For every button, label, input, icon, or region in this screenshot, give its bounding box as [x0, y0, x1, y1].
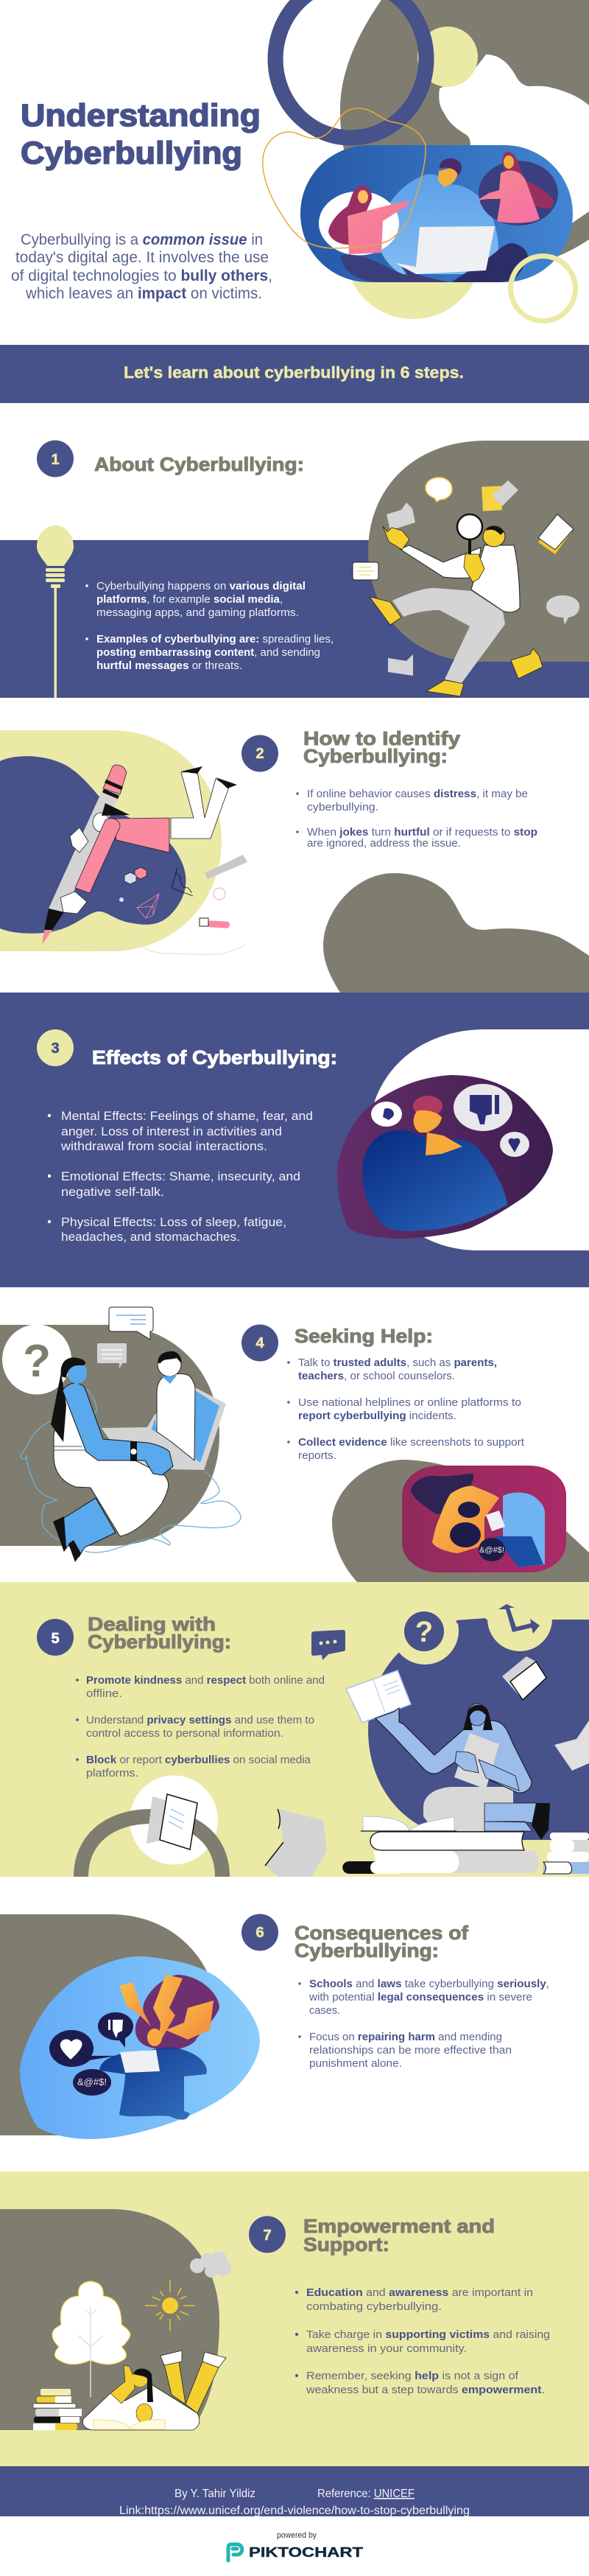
laptop — [395, 226, 495, 274]
bullet list: report cyberbullying incidents. — [298, 1410, 456, 1422]
bullet list: Examples of cyberbullying are: spreading lies, — [96, 633, 334, 645]
panel: step 5 dealing with cyberbullying — [0, 1582, 589, 1877]
bullet list: Education and awareness are important in — [306, 2286, 533, 2299]
bullet list: Talk to trusted adults, such as parents, — [298, 1357, 497, 1369]
bullet list: teachers, or school counselors. — [298, 1370, 455, 1382]
left woman head — [358, 190, 368, 203]
bullet list: hurtful messages or threats. — [96, 659, 242, 672]
illustration: grey open book — [265, 1809, 327, 1877]
yellow hand — [383, 526, 409, 550]
graph lines — [172, 868, 193, 896]
pencil bands — [103, 781, 122, 797]
hand on handle — [464, 554, 484, 582]
decorative navy ring — [275, 0, 426, 138]
icon: broken heart — [500, 1132, 529, 1157]
footer credits — [0, 2466, 589, 2517]
middle book — [373, 1851, 539, 1873]
head — [68, 1362, 87, 1384]
chemistry hexagons — [124, 867, 147, 884]
intro paragraph: today's digital age. It involves the use — [15, 249, 269, 266]
bullet list: control access to personal information. — [86, 1727, 283, 1740]
bullet list — [298, 1978, 549, 2070]
document shadow — [147, 1796, 171, 1844]
number badge: 7 — [263, 2227, 272, 2244]
man torso — [378, 174, 498, 274]
held book — [454, 1733, 499, 1789]
bullet list: Understand privacy settings and use them to — [86, 1714, 314, 1726]
white circle — [130, 1776, 218, 1864]
neck — [426, 1133, 462, 1155]
navy background — [0, 993, 589, 1287]
grey legs — [392, 588, 505, 683]
bullet list: cyberbullying. — [307, 801, 378, 813]
intro paragraph — [11, 231, 272, 302]
footer credits: Reference: UNICEF — [317, 2488, 415, 2500]
grey folder — [387, 503, 415, 531]
icon: cloud — [190, 2251, 231, 2278]
white pill — [368, 1029, 589, 1250]
number badge: 1 — [51, 452, 60, 468]
bullet list: are ignored, address the issue. — [307, 837, 461, 850]
illustration: man with magnifying glass — [353, 477, 579, 696]
grey document — [492, 480, 518, 506]
number badge: 5 — [51, 1631, 60, 1647]
socks — [161, 2351, 182, 2365]
bullet list: relationships can be more effective than — [309, 2044, 512, 2057]
bullet list: combating cyberbullying. — [306, 2300, 442, 2313]
hand over face — [414, 1110, 442, 1133]
black book — [342, 1861, 401, 1874]
panel: step 1 about cyberbullying — [0, 441, 589, 698]
tablet — [486, 1511, 505, 1531]
banner: 6 steps — [0, 345, 589, 403]
man trousers left — [341, 255, 449, 282]
bullet list — [295, 2286, 550, 2396]
pencil tip — [42, 930, 52, 945]
right woman body — [477, 170, 540, 223]
tablet — [120, 2050, 160, 2073]
decorative orange squiggle — [263, 108, 426, 248]
bullet list: Collect evidence like screenshots to support — [298, 1436, 525, 1449]
icon: question mark — [404, 1611, 444, 1651]
bullet list: headaches, and stomachaches. — [61, 1230, 240, 1244]
icon: question mark — [2, 1325, 71, 1394]
trousers — [171, 771, 229, 839]
decorative yellow circle top — [417, 27, 478, 87]
illustration: laptop — [102, 1387, 226, 1470]
man trousers right — [451, 243, 528, 282]
hair — [51, 1373, 66, 1442]
headphone cable — [21, 1389, 241, 1553]
grey pill — [368, 441, 589, 662]
yellow cutout circles — [391, 1586, 552, 1665]
bullet list: with potential legal consequences in severe — [308, 1991, 532, 2003]
yellow document — [482, 486, 502, 511]
legs — [164, 2362, 186, 2404]
bullet list: Mental Effects: Feelings of shame, fear, and — [61, 1109, 313, 1123]
gray thigh — [423, 1787, 513, 1831]
arm — [75, 819, 120, 893]
bullet list — [296, 788, 537, 850]
head — [413, 1096, 442, 1116]
heading — [88, 1613, 231, 1653]
heading: How to Identify — [303, 727, 461, 749]
note diamond — [538, 514, 574, 554]
bullet list: Emotional Effects: Shame, insecurity, and — [61, 1169, 300, 1183]
hair — [463, 1705, 493, 1730]
heading — [303, 2215, 495, 2255]
crystal — [137, 894, 159, 918]
number badge — [241, 735, 278, 772]
decorative blob: grey cloud — [340, 0, 589, 256]
title: Understanding — [21, 98, 261, 133]
yellow arm and hand — [110, 2365, 135, 2404]
bullet list: platforms. — [86, 1767, 138, 1779]
icon: arrows — [498, 1604, 540, 1634]
man hair — [440, 158, 462, 175]
head — [132, 2370, 148, 2387]
white dress — [54, 1395, 169, 1536]
small note — [353, 562, 378, 580]
orange figure — [432, 1486, 499, 1553]
bullet list: Remember, seeking help is not a sign of — [306, 2370, 519, 2382]
bullet list: weakness but a step towards empowerment . — [306, 2384, 545, 2396]
icon: question mark: ? — [415, 1616, 433, 1648]
document lines — [169, 1809, 184, 1829]
face — [147, 2029, 162, 2046]
thumbs down bubble — [98, 2012, 133, 2048]
illustration: woman comforting victim — [402, 1466, 566, 1572]
test tube — [200, 918, 230, 928]
blue trousers — [484, 1803, 543, 1831]
panel: step 4 seeking help — [0, 1307, 589, 1582]
document — [160, 1794, 197, 1849]
yellow background — [0, 1582, 589, 1877]
right video bubble — [479, 161, 558, 225]
bullet list: Take charge in supporting victims and raising — [306, 2328, 550, 2341]
icon: thumbs down — [454, 1084, 512, 1131]
magnifying glass — [457, 514, 482, 573]
panel: hero — [11, 0, 589, 321]
hair — [133, 2368, 153, 2402]
grey pill — [0, 1914, 219, 2135]
yellow background — [0, 2171, 589, 2466]
hatch strip — [205, 855, 247, 879]
title: Cyberbullying — [21, 136, 242, 171]
head — [468, 1704, 487, 1726]
illustration: white tree — [52, 2281, 130, 2397]
dot — [119, 897, 124, 902]
number badge: 6 — [255, 1925, 264, 1941]
image background — [300, 145, 573, 282]
bullet list: platforms, for example social media, — [96, 593, 283, 606]
hands — [60, 827, 88, 914]
panel: step 3 effects — [0, 993, 589, 1287]
profanity bubble: &@#$! — [77, 2076, 107, 2087]
grey pill — [0, 1325, 219, 1546]
illustration: girl reading — [82, 2351, 226, 2430]
icon: sun — [145, 2281, 195, 2331]
heading: Empowerment and — [303, 2215, 495, 2237]
heading: Cyberbullying: — [88, 1631, 231, 1653]
left video bubble — [319, 192, 399, 255]
bullet list: offline. — [86, 1687, 122, 1700]
grey arch — [81, 1816, 222, 1877]
powered by Piktochart: PIKTOCHART — [249, 2544, 364, 2560]
decorative yellow ring — [511, 256, 576, 321]
illustration: girl reading on books — [342, 1656, 589, 1874]
right woman head — [504, 155, 514, 169]
navy pill — [368, 1620, 589, 1840]
icon: chat bubble — [311, 1630, 345, 1660]
panel: step 2 how to identify — [0, 727, 589, 993]
heading: Cyberbullying: — [294, 1939, 439, 1961]
white torso — [471, 545, 520, 612]
floating book right — [554, 1721, 589, 1771]
grey pill — [0, 2209, 219, 2430]
bullet list: Physical Effects: Loss of sleep, fatigue, — [61, 1215, 286, 1229]
speech bubbles — [450, 1502, 505, 1561]
bullet list: Focus on repairing harm and mending — [309, 2031, 502, 2043]
connector — [456, 1620, 486, 1622]
body — [362, 1130, 507, 1231]
illustration: man — [157, 1351, 195, 1460]
heading — [294, 1922, 468, 1961]
intro paragraph: which leaves an impact on victims. — [25, 285, 262, 302]
bullet list: punishment alone. — [309, 2057, 402, 2070]
lightning bolts — [119, 1975, 214, 2045]
right woman hair — [502, 152, 554, 209]
right book stack — [543, 1833, 589, 1874]
heading: About Cyberbullying: — [94, 453, 304, 475]
illustration: distressed person — [337, 1075, 553, 1239]
bullet list: Schools and laws take cyberbullying seriously, — [309, 1978, 549, 1990]
blue body — [99, 2047, 207, 2120]
torso and arm — [375, 1708, 532, 1793]
bullet list: reports. — [298, 1449, 336, 1462]
magenta frame — [402, 1466, 566, 1572]
heading — [303, 727, 461, 767]
footer credits: By Y. Tahir Yildiz — [174, 2488, 255, 2500]
speech bubble white — [109, 1307, 153, 1340]
navy band — [0, 540, 589, 698]
illustration: stack of books — [33, 2389, 82, 2430]
heels — [53, 1516, 81, 1562]
icon: question mark: ? — [23, 1336, 51, 1387]
yellow folder — [511, 648, 543, 679]
bullet list: posting embarrassing content, and sending — [96, 646, 320, 659]
belt — [54, 1446, 87, 1450]
heading: Consequences of — [294, 1922, 468, 1944]
lower hand — [136, 2404, 152, 2423]
illustration: three people on a video call — [300, 145, 573, 282]
illustration: arch with document — [81, 1776, 222, 1877]
sky blob — [20, 1956, 260, 2139]
white book — [370, 1832, 524, 1850]
number badge: 2 — [255, 746, 264, 762]
bullet list: negative self-talk. — [61, 1185, 164, 1199]
shoes — [181, 766, 237, 788]
bullet list — [287, 1357, 525, 1462]
bullet list: Block or report cyberbullies on social media — [86, 1754, 311, 1766]
icon: lightbulb — [37, 525, 74, 698]
bullet list: Cyberbullying happens on various digital — [96, 580, 306, 592]
bullet list: awareness in your community. — [306, 2342, 467, 2355]
squiggle — [44, 943, 246, 954]
blue figure lower — [495, 1536, 543, 1567]
heading: Dealing with — [88, 1613, 216, 1635]
purple blob — [337, 1075, 553, 1239]
bullet list: Use national helplines or online platforms to — [298, 1396, 521, 1409]
footer credits: Link:https://www.unicef.org/end-violence/how-to-stop-cyberbullying — [119, 2505, 470, 2517]
number badge: 3 — [51, 1040, 60, 1057]
powered by Piktochart — [228, 2531, 364, 2561]
open book — [94, 2420, 165, 2429]
broken heart bubble — [49, 2030, 116, 2067]
bullet list: Promote kindness and respect both online and — [86, 1674, 325, 1687]
illustration: woman in white with blue skin — [51, 1357, 173, 1562]
shirt — [113, 818, 169, 853]
heading: Effects of Cyberbullying: — [92, 1046, 337, 1068]
bullet list: messaging apps, and gaming platforms. — [96, 606, 299, 619]
bubble symbol: &@#$! — [479, 1546, 504, 1555]
grey blob — [323, 873, 589, 993]
heading: Cyberbullying: — [303, 745, 448, 767]
heading: Support: — [303, 2233, 389, 2255]
powered by Piktochart: powered by — [277, 2531, 317, 2540]
bullet list — [48, 1109, 313, 1244]
watch — [130, 1441, 137, 1461]
number badge — [37, 1029, 74, 1066]
hand on book — [455, 1751, 519, 1791]
bullet list: If online behavior causes distress, it may be — [307, 788, 528, 800]
icon: Piktochart logo — [228, 2544, 242, 2561]
icon: speech bubble — [371, 1102, 402, 1127]
number badge — [37, 1619, 74, 1656]
head — [483, 526, 505, 547]
illustration: person and giant pencil — [42, 765, 247, 954]
number badge — [241, 1325, 278, 1362]
speech bubble grey — [97, 1343, 127, 1369]
navy blob — [0, 756, 186, 934]
arm — [63, 1383, 173, 1475]
floating book left — [346, 1670, 411, 1723]
grey speech bubble — [546, 595, 579, 625]
blue figure — [503, 1493, 545, 1567]
yellow pill — [0, 730, 222, 951]
floating speech bubble — [426, 477, 452, 502]
left woman hair — [328, 186, 372, 245]
dark hair — [411, 1474, 473, 1514]
floating book top — [502, 1656, 546, 1700]
open book on stack — [361, 1816, 456, 1831]
banner: 6 steps: Let's learn about cyberbullying in 6 steps. — [124, 363, 464, 382]
panel: step 7 empowerment — [0, 2171, 589, 2466]
pencil body — [49, 788, 120, 912]
left woman body — [348, 200, 409, 254]
shoe — [532, 1803, 550, 1840]
bullet list: withdrawal from social interactions. — [60, 1139, 267, 1153]
bullet list: cases. — [309, 2004, 340, 2017]
number badge: 4 — [255, 1335, 264, 1351]
yellow shoes — [370, 597, 464, 696]
pencil lead — [44, 909, 64, 930]
bullet list: anger. Loss of interest in activities and — [61, 1124, 282, 1138]
white arm — [400, 545, 481, 578]
bullet list — [76, 1674, 325, 1779]
number badge — [249, 2216, 286, 2253]
pink circle — [214, 888, 225, 900]
bullet list: When jokes turn hurtful or if requests to stop — [307, 826, 537, 839]
white body — [82, 2385, 200, 2430]
panel: step 6 consequences — [0, 1914, 549, 2139]
headband — [61, 1357, 85, 1378]
number badge — [241, 1914, 278, 1951]
title — [21, 98, 261, 171]
decorative yellow ellipse bottom — [346, 189, 480, 319]
man neck and face — [438, 167, 458, 187]
number badge — [37, 441, 74, 477]
illustration: overwhelmed person — [20, 1956, 260, 2139]
legs — [57, 1498, 116, 1557]
pencil eraser — [103, 765, 127, 794]
grey blob — [332, 1460, 589, 1582]
profanity bubble — [73, 2069, 111, 2096]
head — [93, 803, 130, 832]
intro paragraph: of digital technologies to bully others, — [11, 267, 272, 284]
purple hair — [135, 1975, 219, 2050]
intro paragraph: Cyberbullying is a common issue in — [21, 231, 263, 248]
grey note — [388, 654, 413, 676]
heading: Seeking Help: — [294, 1325, 433, 1347]
bullet list — [85, 580, 334, 672]
